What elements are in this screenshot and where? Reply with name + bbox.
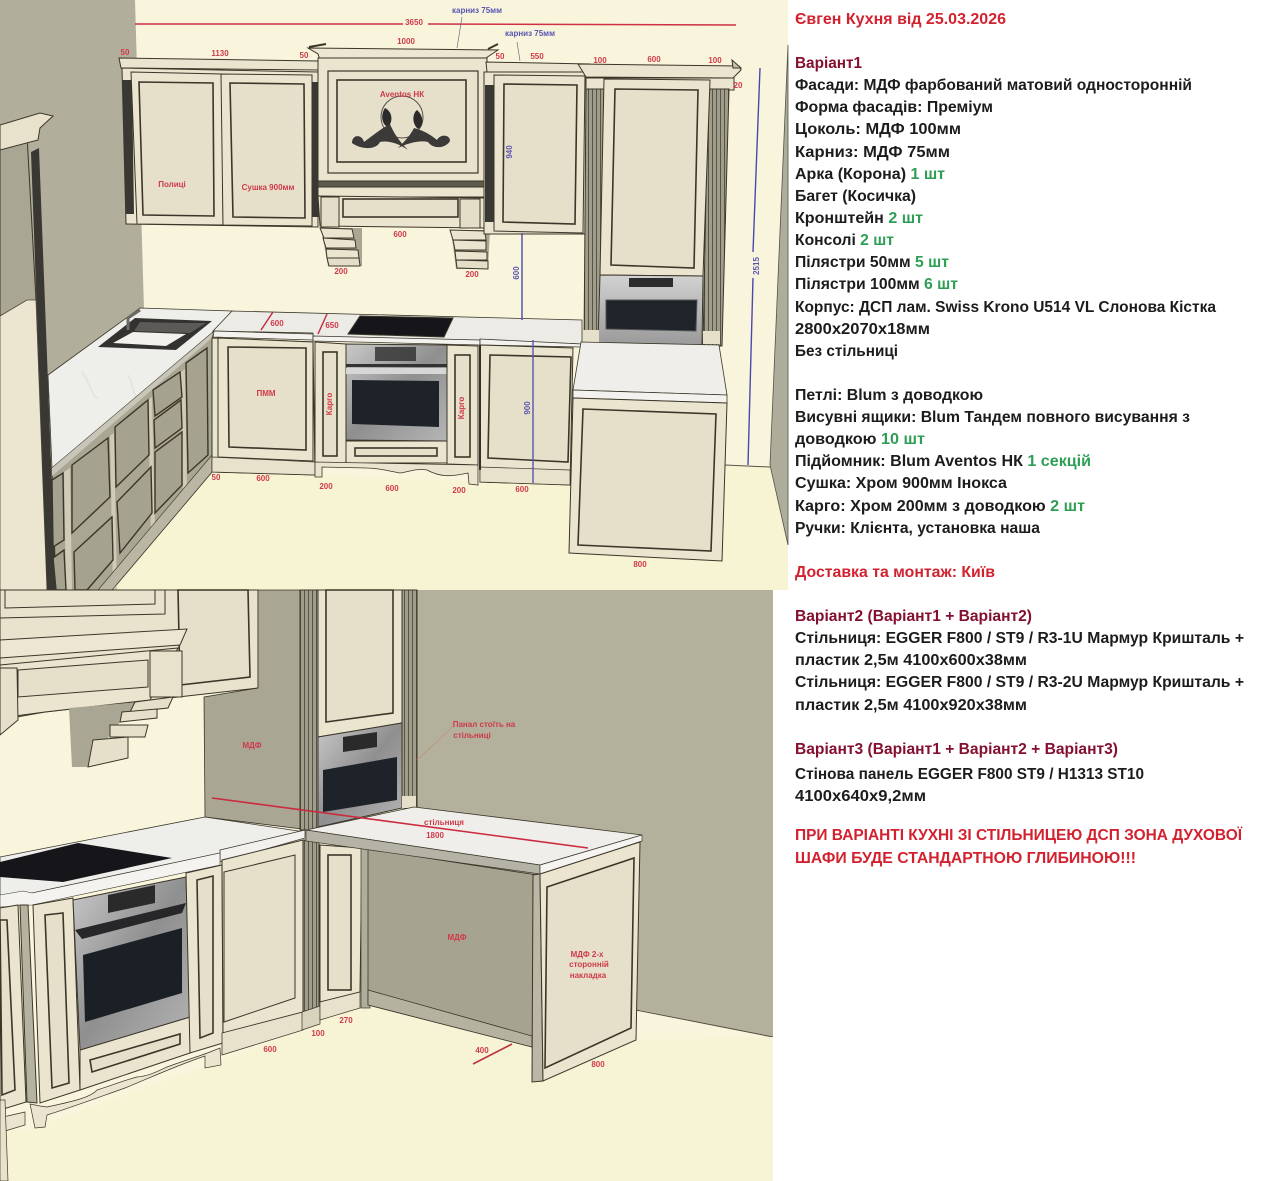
- dimension labels: bottom render: 1800: [426, 831, 444, 840]
- MDF back panel under peninsula: [368, 849, 537, 1047]
- text block: variant 1: Пілястри 100мм 6 шт: [795, 276, 958, 293]
- peninsula MDF end panel: [532, 842, 640, 1082]
- base cabinet right of oven: [186, 840, 370, 1055]
- dimension labels: top render: карниз 75мм: [452, 6, 502, 15]
- dimension labels: top render: Полиці: [158, 180, 186, 189]
- dimension labels: top render: 600: [385, 484, 399, 493]
- text block: variant 2: Стільниця: EGGER F800 / ST9 / R3-2U Мармур Кришталь +: [795, 674, 1244, 691]
- left run lower cabinets: [52, 333, 212, 590]
- text block: variant 1: Форма фасадів: Преміум: [795, 99, 993, 116]
- text block: variant 1: Ручки: Клієнта, установка наша: [795, 520, 1040, 537]
- dimension labels: bottom render: [242, 720, 609, 1069]
- base cabinet right: [479, 345, 573, 485]
- dimension labels: bottom render: стільниці: [453, 731, 491, 740]
- shaped plinth: [315, 462, 478, 485]
- tall cabinet with built-in oven: [578, 60, 741, 346]
- dimension labels: bottom render: МДФ 2-х: [571, 950, 604, 959]
- dimension labels: bottom render: МДФ: [242, 741, 262, 750]
- dimension labels: top render: 2515: [752, 257, 761, 275]
- dimension labels: bottom render: 600: [263, 1045, 277, 1054]
- text block: specification title: Євген Кухня від 25.03.2026: [795, 11, 1006, 28]
- dimension labels: top render: 200: [334, 267, 348, 276]
- dimension labels: top render: 3650: [405, 18, 423, 27]
- peninsula worktop: [306, 807, 642, 874]
- text block: variant 1: доводкою 10 шт: [795, 431, 925, 448]
- text block: variant 1: Підйомник: Blum Aventos НК 1 секцій: [795, 453, 1091, 470]
- dimension labels: top render: ПММ: [256, 389, 276, 398]
- dimension labels: bottom render: МДФ: [447, 933, 467, 942]
- dimension labels: top render: 600: [270, 319, 284, 328]
- dimension labels: top render: 600: [647, 55, 661, 64]
- dimension labels: top render: 940: [505, 145, 514, 159]
- text block: variant 1: Варіант1: [795, 55, 862, 72]
- icon: hob: [0, 843, 172, 882]
- base cabinets around oven: [315, 342, 478, 485]
- dimension labels: bottom render: 270: [339, 1016, 353, 1025]
- dimension labels: bottom render: накладка: [570, 971, 607, 980]
- dimension labels: top render: 1000: [397, 37, 415, 46]
- text block: variant 1: Висувні ящики: Blum Тандем повного висування з: [795, 409, 1190, 426]
- dimension lines: [135, 17, 760, 483]
- dimension labels: top render: 100: [708, 56, 722, 65]
- text block: variant 3: [795, 741, 1144, 805]
- upper right cabinet: [484, 62, 590, 234]
- dimension labels: top render: 1130: [211, 49, 229, 58]
- text block: variant 1: Арка (Корона) 1 шт: [795, 166, 945, 183]
- text block: variant 1: Кронштейн 2 шт: [795, 210, 923, 227]
- red measuring lines: [212, 725, 588, 1064]
- text block: variant 3: Стінова панель EGGER F800 ST9 / H1313 ST10: [795, 766, 1144, 783]
- text block: delivery: Доставка та монтаж: Київ: [795, 564, 995, 581]
- panel: top kitchen render: [0, 0, 788, 590]
- text block: variant 1: Консолі 2 шт: [795, 232, 894, 249]
- icon: hob: [348, 316, 453, 337]
- panel: bottom kitchen render: [0, 590, 773, 1181]
- dimension labels: top render: 100: [593, 56, 607, 65]
- text block: variant 1: Карниз: МДФ 75мм: [795, 144, 950, 161]
- upper left cabinet: [119, 58, 319, 227]
- dimension labels: top render: 200: [319, 482, 333, 491]
- dimension labels: bottom render: 800: [591, 1060, 605, 1069]
- dimension labels: top render: 600: [515, 485, 529, 494]
- peninsula worktop and end panel: [569, 342, 727, 561]
- text block: variant 3: Варіант3 (Варіант1 + Варіант2 + Варіант3): [795, 741, 1118, 758]
- tall cabinet with oven: [300, 590, 417, 830]
- dimension labels: top render: 600: [256, 474, 270, 483]
- worktop, sink and hob: [48, 308, 582, 468]
- dimension labels: top render: 50: [212, 473, 221, 482]
- base cabinet: dishwasher: [212, 338, 315, 475]
- dimension labels: top render: 50: [496, 52, 505, 61]
- dimension labels: top render: [121, 6, 761, 569]
- dimension labels: top render: Сушка 900мм: [242, 183, 294, 192]
- dimension labels: top render: 50: [121, 48, 130, 57]
- hood with ornament: [308, 44, 498, 228]
- icon: right bracket: [450, 230, 490, 269]
- left foreground tall cabinet: [0, 113, 56, 590]
- plinth of MDF back panel: [368, 990, 532, 1047]
- dimension labels: bottom render: стільниця: [424, 818, 464, 827]
- text block: variant 1: 2800х2070х18мм: [795, 321, 930, 338]
- callout: warning: ШАФИ БУДЕ СТАНДАРТНОЮ ГЛИБИНОЮ!!!: [795, 850, 1136, 867]
- dimension labels: bottom render: сторонній: [569, 960, 609, 969]
- upper cabinets: [0, 590, 258, 720]
- text block: variant 1: [795, 55, 1216, 537]
- text block: variant 2: пластик 2,5м 4100х920х38мм: [795, 697, 1027, 714]
- icon: bracket large: [0, 668, 173, 767]
- text block: variant 1: Багет (Косичка): [795, 188, 916, 205]
- text block: variant 2: [795, 608, 1244, 714]
- text block: variant 1: Фасади: МДФ фарбований матовий односторонній: [795, 77, 1192, 94]
- dimension labels: top render: 550: [530, 52, 544, 61]
- dimension labels: top render: 50: [300, 51, 309, 60]
- dimension labels: top render: карниз 75мм: [505, 29, 555, 38]
- dimension labels: top render: Карго: [325, 393, 334, 415]
- dimension labels: top render: 600: [393, 230, 407, 239]
- icon: left bracket: [320, 228, 362, 266]
- text block: variant 1: Без стільниці: [795, 343, 898, 360]
- text block: variant 1: Петлі: Blum з доводкою: [795, 387, 983, 404]
- text block: variant 1: Карго: Хром 200мм з доводкою 2 шт: [795, 498, 1085, 515]
- text block: variant 1: Корпус: ДСП лам. Swiss Krono U514 VL Слонова Кістка: [795, 299, 1216, 316]
- text block: variant 3: 4100х640х9,2мм: [795, 788, 926, 805]
- dimension labels: bottom render: 100: [311, 1029, 325, 1038]
- dimension labels: top render: 900: [523, 401, 532, 415]
- dimension labels: bottom render: Панал стоїть на: [453, 720, 516, 729]
- text block: variant 1: Пілястри 50мм 5 шт: [795, 254, 949, 271]
- text block: variant 1: Сушка: Хром 900мм Інокса: [795, 475, 1007, 492]
- base cabinets front: [0, 898, 221, 1181]
- icon: sink: [98, 310, 212, 350]
- text block: variant 1: Цоколь: МДФ 100мм: [795, 121, 961, 138]
- text block: variant 2: Варіант2 (Варіант1 + Варіант2): [795, 608, 1032, 625]
- dimension labels: top render: Карго: [457, 397, 466, 419]
- dimension labels: top render: 600: [512, 266, 521, 280]
- worktop with hob: [0, 817, 305, 907]
- built-in oven lower: [73, 877, 190, 1050]
- dimension labels: top render: Aventos НК: [380, 90, 424, 99]
- text block: variant 2: пластик 2,5м 4100х600х38мм: [795, 652, 1027, 669]
- dimension labels: top render: 200: [452, 486, 466, 495]
- callout: warning: ПРИ ВАРІАНТІ КУХНІ ЗІ СТІЛЬНИЦЕЮ ДСП ЗОНА ДУХОВОЇ: [795, 827, 1243, 844]
- dimension labels: bottom render: 400: [475, 1046, 489, 1055]
- dimension labels: top render: 20: [734, 81, 743, 90]
- callout: warning: [795, 827, 1243, 867]
- dimension labels: top render: 200: [465, 270, 479, 279]
- dimension labels: top render: 650: [325, 321, 339, 330]
- text block: variant 2: Стільниця: EGGER F800 / ST9 / R3-1U Мармур Кришталь +: [795, 630, 1244, 647]
- MDF wall panel: [204, 590, 302, 829]
- dimension labels: top render: 800: [633, 560, 647, 569]
